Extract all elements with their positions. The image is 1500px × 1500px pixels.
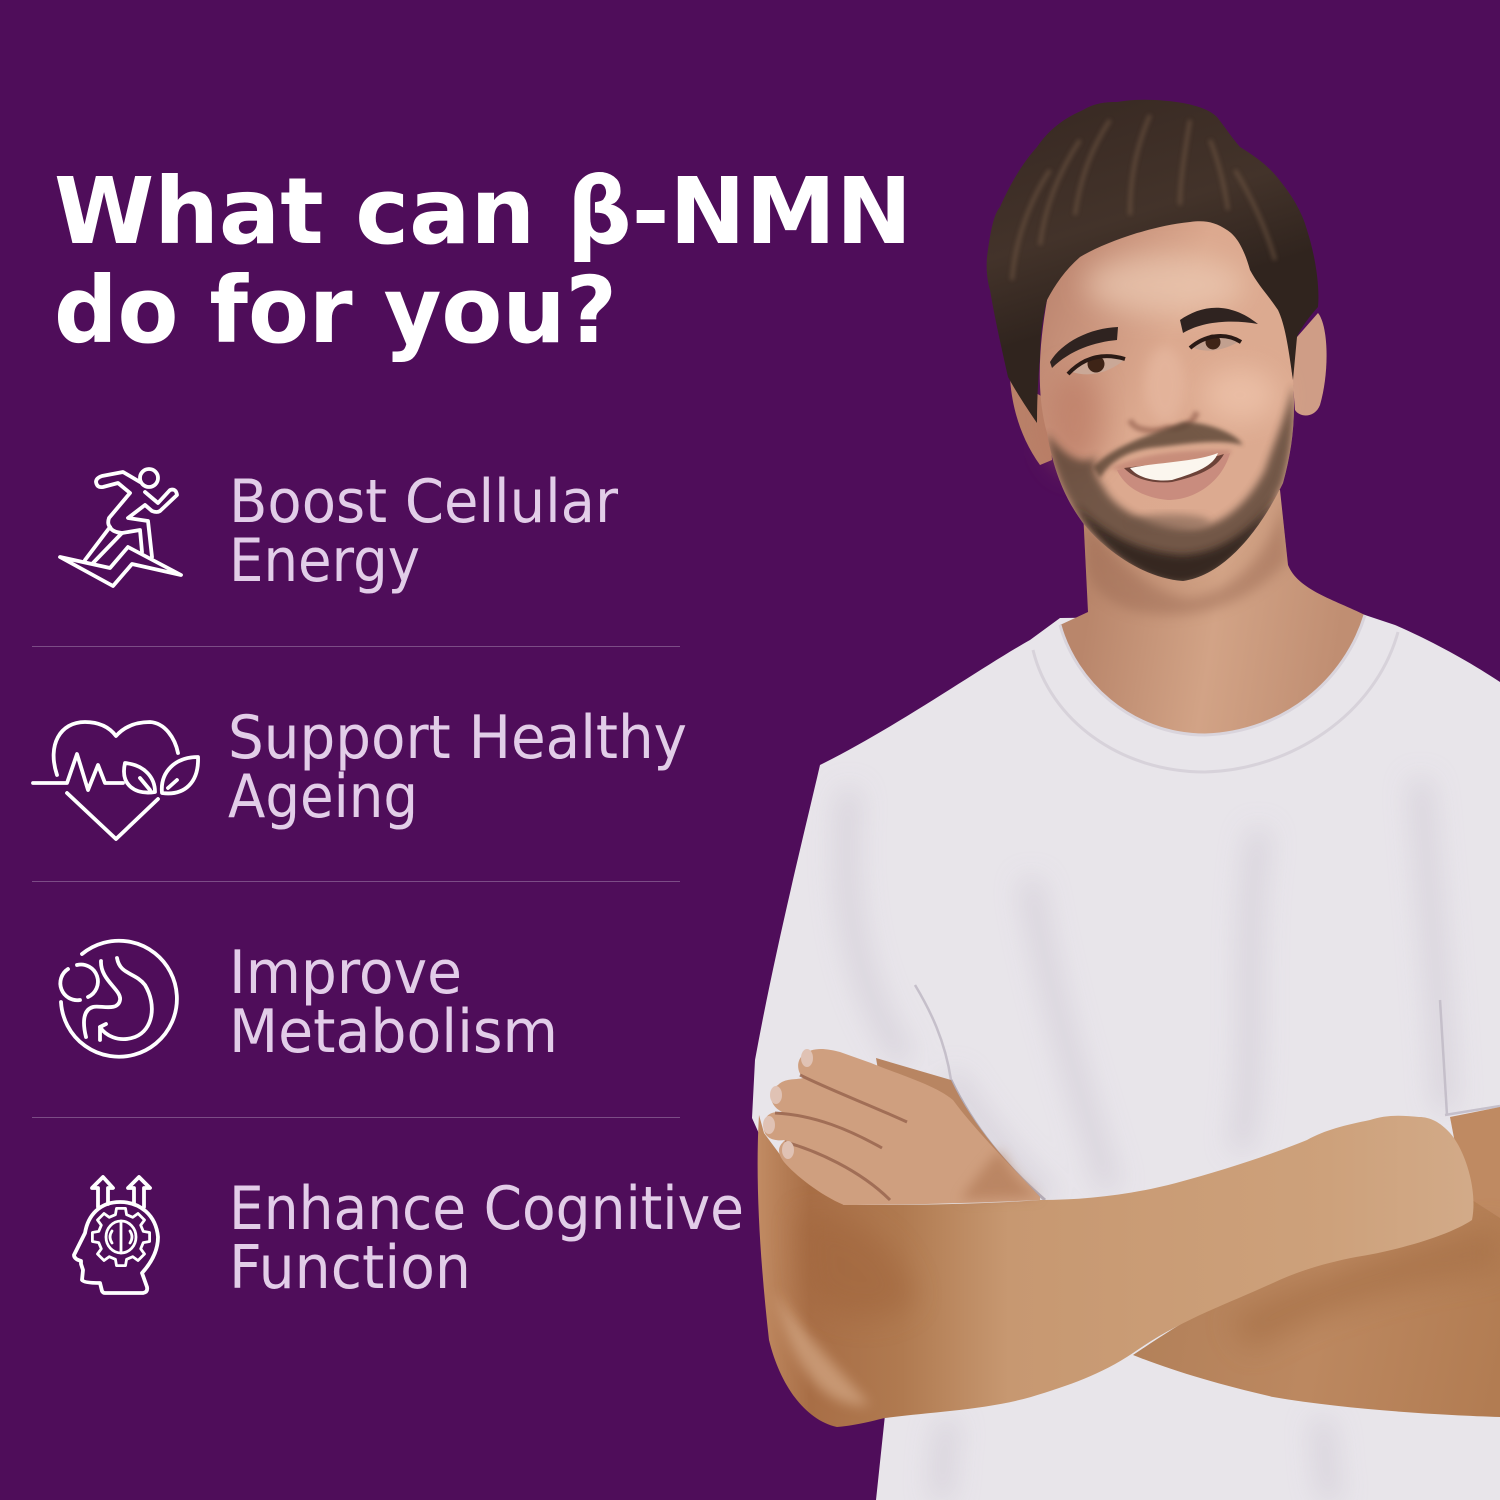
nose [1130, 347, 1197, 430]
neck [1060, 490, 1365, 735]
benefit text: Enhance Cognitive Function: Function [229, 1233, 471, 1303]
shirt torso seam shadow [951, 1080, 1045, 1200]
neck shadow [1085, 500, 1288, 615]
right ear [1290, 313, 1327, 415]
benefit text: Enhance Cognitive Function [229, 1174, 744, 1303]
face [1040, 204, 1294, 581]
benefit text: Improve Metabolism [229, 938, 558, 1067]
icon: heart with pulse and leaves [33, 722, 198, 839]
benefit text: Improve Metabolism: Metabolism [229, 997, 558, 1067]
front forearm [758, 1115, 1473, 1427]
benefit text: Support Healthy Ageing: Ageing [228, 762, 418, 832]
right upper arm [1450, 1107, 1500, 1232]
benefit text: Support Healthy Ageing: Support Healthy [228, 703, 687, 773]
benefit text: Improve Metabolism: Improve [229, 938, 462, 1008]
teeth [1130, 453, 1218, 480]
sleeve seams [915, 985, 1500, 1115]
elbow highlight [775, 1290, 870, 1405]
title: What can β-NMN [54, 158, 912, 265]
title: do for you? [54, 257, 617, 364]
rear arm crease shadow [1230, 1225, 1500, 1350]
upper lip [1110, 450, 1232, 472]
mouth [1117, 453, 1230, 500]
t-shirt [752, 615, 1500, 1500]
cheek highlight [1202, 367, 1278, 423]
icon: stomach metabolism [60, 941, 177, 1057]
icon: head with brain gear and arrows [74, 1177, 158, 1293]
skin behind hand [876, 1058, 1040, 1200]
title [54, 158, 912, 364]
hair [987, 100, 1318, 423]
benefit text: Support Healthy Ageing [228, 703, 687, 832]
soul patch [1130, 514, 1210, 530]
mouth interior [1124, 454, 1224, 482]
left ear [1010, 378, 1052, 465]
icon: running figure [60, 469, 181, 586]
shirt folds [847, 780, 1445, 1500]
chin beard [1075, 495, 1278, 585]
person photo [752, 100, 1500, 1500]
hand [764, 1049, 1040, 1205]
left eye [1068, 356, 1125, 374]
forearm shade [800, 1215, 915, 1318]
fingernails [763, 1049, 813, 1159]
benefit text: Boost Cellular Energy: Energy [229, 526, 420, 596]
collar [1060, 615, 1365, 735]
moustache [1093, 422, 1243, 478]
benefit text: Boost Cellular Energy [229, 467, 618, 596]
left eyebrow [1050, 327, 1118, 368]
benefit text: Enhance Cognitive Function: Enhance Cognitive [229, 1174, 744, 1244]
left cheek shade [1047, 370, 1103, 470]
right eye [1190, 334, 1241, 351]
beard stubble [1047, 385, 1294, 585]
rear forearm [1133, 1200, 1500, 1417]
right eyebrow [1180, 308, 1258, 333]
forehead highlight [1085, 255, 1245, 315]
hair strands [1012, 115, 1275, 280]
benefit text: Boost Cellular Energy: Boost Cellular [229, 467, 618, 537]
